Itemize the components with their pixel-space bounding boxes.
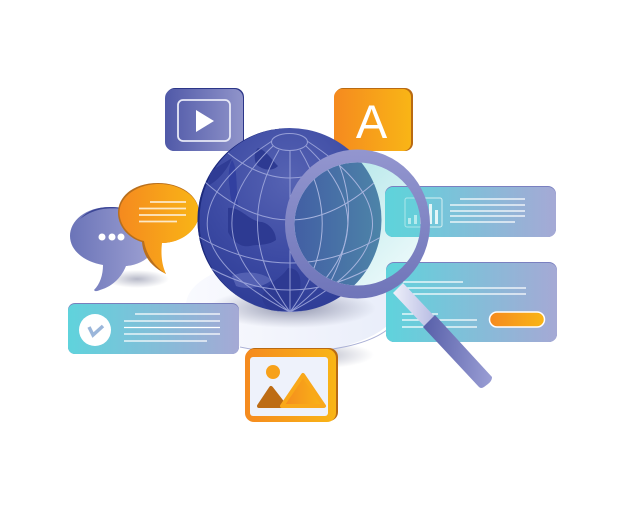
button [490, 312, 544, 327]
icon: orange speech bubble [118, 183, 199, 274]
icon: image tile [245, 348, 338, 422]
globe [198, 128, 350, 312]
icon: letter A tile: A [356, 95, 388, 148]
magnifying glass [285, 150, 492, 388]
infographic: global web search illustration [68, 88, 557, 422]
icon: video play tile [165, 88, 244, 151]
icon: bar chart [405, 198, 442, 227]
icon: letter A tile [334, 88, 413, 151]
panel: article card with button [386, 262, 557, 342]
panel: checkmark card [68, 303, 239, 354]
ring [285, 150, 430, 298]
lens backdrop [294, 162, 422, 286]
grid lines [199, 133, 328, 312]
handle [393, 283, 492, 388]
icon: check circle [79, 314, 111, 346]
icon: purple speech bubble [70, 207, 169, 291]
continents [208, 148, 300, 312]
panel: chart card [385, 186, 556, 237]
platform under globe [186, 258, 398, 369]
lens view of globe [294, 162, 420, 286]
